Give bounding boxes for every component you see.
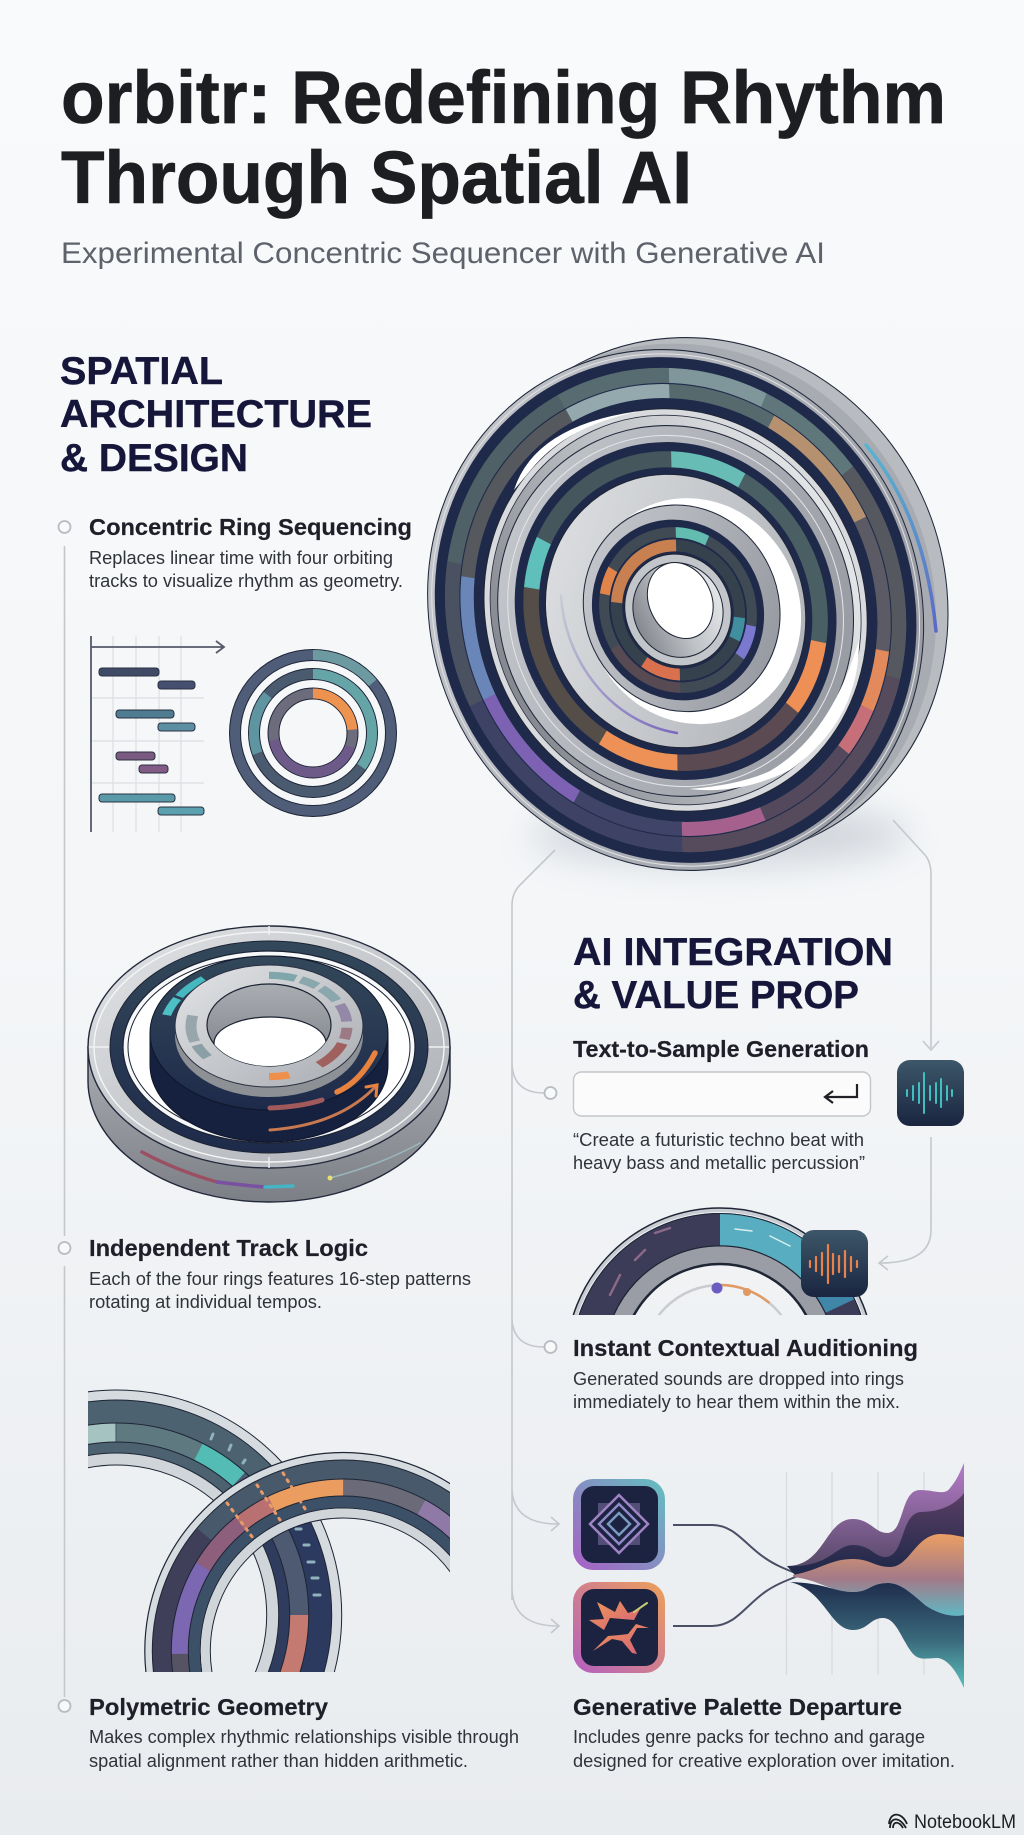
- connector lines: right column: [512, 820, 939, 1633]
- ring one: [88, 1390, 342, 1672]
- prompt quote text: heavy bass and metallic percussion”: [573, 1153, 865, 1173]
- text block: generative palette departure: designed for creative exploration over imitation.: [573, 1751, 955, 1771]
- accent arc: blue: [866, 445, 936, 631]
- torus orange arrow: [270, 1053, 377, 1130]
- icon: techno diamond: [573, 1479, 665, 1570]
- text block: polymetric geometry: Makes complex rhythmic relationships visible through: [89, 1727, 519, 1747]
- diagram: linear sequencer grid: [91, 636, 224, 832]
- text block: instant contextual auditioning: Generated sounds are dropped into rings: [573, 1369, 904, 1389]
- text block: concentric ring sequencing: Replaces linear time with four orbiting: [89, 548, 393, 568]
- torus inner silver ring: [175, 965, 363, 1097]
- stream teal layer: [790, 1582, 964, 1688]
- torus outer base: [88, 926, 450, 1202]
- icon: teal waveform: [897, 1060, 964, 1126]
- stream dark plum layer: [787, 1493, 964, 1575]
- text block: concentric ring sequencing: [89, 514, 412, 591]
- text block: independent track logic: Independent Track Logic: [89, 1235, 368, 1261]
- text block: polymetric geometry: [89, 1694, 519, 1771]
- subtitle: Experimental Concentric Sequencer with Generative AI: [61, 237, 825, 270]
- text block: instant contextual auditioning: [573, 1335, 918, 1412]
- diagram: 3D stacked torus: [88, 926, 450, 1202]
- disc extrusion: [355, 256, 1024, 946]
- outer ring: [254, 177, 1024, 1043]
- text block: instant contextual auditioning: immediately to hear them within the mix.: [573, 1392, 900, 1412]
- heading: AI integration and value prop: AI INTEGRATION: [573, 931, 893, 974]
- hero: tilted concentric disc: [254, 177, 1024, 1043]
- generative stream graph: [673, 1463, 964, 1688]
- NotebookLM logo: NotebookLM: [914, 1812, 1016, 1833]
- diagram: ring arc with dropped sample: [572, 1207, 868, 1315]
- heading: spatial architecture and design: [60, 350, 372, 480]
- torus ring segments: [159, 954, 379, 1098]
- left timeline: [58, 521, 70, 1712]
- text block: polymetric geometry: Polymetric Geometry: [89, 1694, 328, 1720]
- heading: spatial architecture and design: ARCHITECTURE: [60, 393, 372, 436]
- heading: spatial architecture and design: & DESIGN: [60, 437, 248, 480]
- text-to-sample heading: Text-to-Sample Generation: [573, 1036, 869, 1062]
- text block: independent track logic: Each of the four rings features 16-step patterns: [89, 1269, 471, 1289]
- text block: generative palette departure: [573, 1694, 955, 1771]
- text block: instant contextual auditioning: Instant Contextual Auditioning: [573, 1335, 918, 1361]
- torus rainbow side line: [142, 1143, 420, 1187]
- diagram: flat concentric rings: [235, 655, 391, 811]
- text block: polymetric geometry: spatial alignment rather than hidden arithmetic.: [89, 1751, 468, 1771]
- icon: garage burst: [573, 1582, 665, 1673]
- torus dark block: [150, 956, 388, 1142]
- middle ring: [405, 332, 947, 890]
- inner ring: [540, 468, 816, 752]
- text block: generative palette departure: Includes genre packs for techno and garage: [573, 1727, 925, 1747]
- heading: AI integration and value prop: [573, 931, 893, 1017]
- stream purple layer: [787, 1463, 964, 1575]
- torus cyan segments: [123, 938, 415, 1128]
- stream orange core: [793, 1534, 964, 1616]
- icon: orange waveform: [801, 1230, 868, 1297]
- white gap crescents: [514, 411, 859, 790]
- title: [61, 56, 946, 219]
- heading: AI integration and value prop: & VALUE PROP: [573, 974, 859, 1017]
- stream inputs: [673, 1525, 798, 1626]
- text block: concentric ring sequencing: tracks to visualize rhythm as geometry.: [89, 571, 403, 591]
- prompt quote text: “Create a futuristic techno beat with: [573, 1130, 864, 1150]
- text block: independent track logic: [89, 1235, 471, 1312]
- title: orbitr: Redefining Rhythm: [61, 56, 946, 139]
- heading: spatial architecture and design: SPATIAL: [60, 350, 223, 393]
- text block: independent track logic: rotating at individual tempos.: [89, 1292, 322, 1312]
- text block: generative palette departure: Generative Palette Departure: [573, 1694, 902, 1720]
- title: Through Spatial AI: [61, 136, 692, 219]
- ring one step marks: [211, 1434, 320, 1595]
- accent arc: purple: [561, 596, 677, 733]
- alignment dots: [227, 1473, 307, 1538]
- prompt quote text: [573, 1130, 865, 1173]
- diagram: overlapping polymetric rings: [88, 1390, 450, 1672]
- prompt input box: [574, 1072, 870, 1116]
- text block: concentric ring sequencing: Concentric Ring Sequencing: [89, 514, 412, 540]
- disc shadow: [530, 805, 910, 865]
- ring two: [144, 1452, 450, 1672]
